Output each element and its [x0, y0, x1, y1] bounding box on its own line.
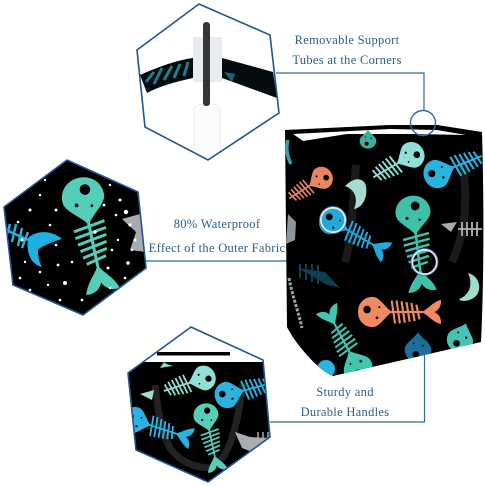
text: waterproof fabric — [149, 217, 285, 255]
callout connector lines — [146, 73, 424, 422]
lower sleeve — [194, 103, 220, 152]
top rim strip — [157, 352, 230, 356]
white speckles — [17, 179, 136, 301]
text: support tubes: Removable Support — [295, 33, 400, 47]
callout ring: corner support tube — [410, 110, 436, 136]
panel: handle close-up hexagon — [118, 327, 274, 482]
panel: waterproof fabric close-up hexagon — [4, 160, 146, 315]
panel: support tube close-up hexagon — [137, 4, 279, 165]
text: waterproof fabric: Effect of the Outer Fabric — [149, 241, 285, 255]
left black band — [140, 58, 193, 93]
text: handles: Durable Handles — [301, 405, 389, 419]
right black band — [222, 58, 277, 98]
callout ring: handle — [411, 248, 438, 276]
text: support tubes: Tubes at the Corners — [292, 53, 402, 67]
text: handles: Sturdy and — [316, 385, 374, 399]
tube rod — [203, 22, 210, 106]
handle — [155, 383, 243, 468]
bag opening — [293, 129, 466, 141]
text: support tubes — [292, 33, 402, 67]
panel: laundry hamper bag — [283, 125, 485, 387]
callout ring: outer fabric — [320, 206, 346, 234]
text: handles — [301, 385, 389, 419]
upper sleeve — [193, 37, 222, 82]
text: waterproof fabric: 80% Waterproof — [174, 217, 261, 231]
